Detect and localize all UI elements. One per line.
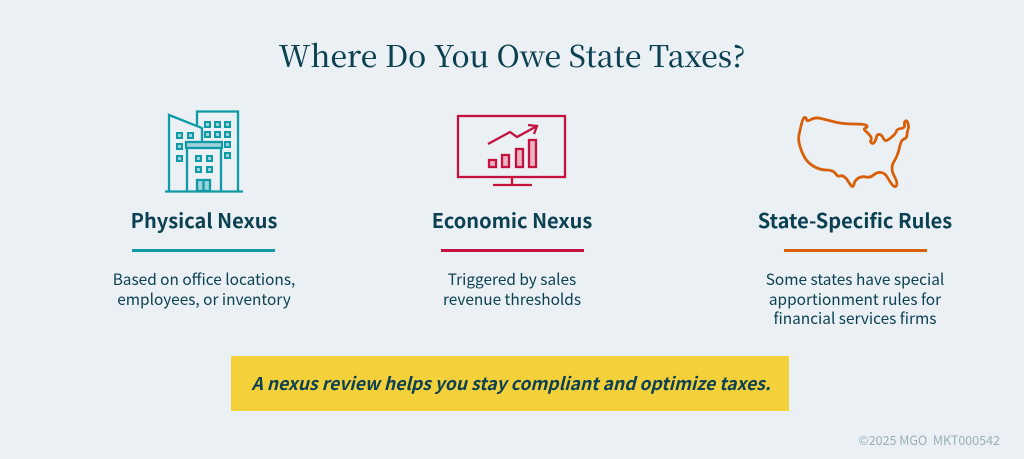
text: physical nexus description: employees, or inventory [117,288,291,310]
rule: crimson [441,249,584,252]
heading: Economic Nexus: Economic Nexus [432,205,592,234]
text: physical nexus description [113,268,295,310]
rule: teal [132,249,275,252]
text: physical nexus description: Based on office locations, [113,268,295,290]
rule: orange [784,249,927,252]
text: economic nexus description [443,268,581,310]
text: state-specific rules description: financial services firms [774,307,936,329]
callout banner [231,356,789,411]
heading: Physical Nexus: Physical Nexus [131,205,277,234]
copyright note: ©2025 MGO MKT000542 [858,430,1000,449]
text: economic nexus description: Triggered by sales [448,268,576,290]
text: state-specific rules description [766,268,944,329]
text: state-specific rules description: apportionment rules for [769,288,941,310]
callout banner: A nexus review helps you stay compliant and optimize taxes. [251,371,771,396]
text: state-specific rules description: Some states have special [766,268,944,290]
heading: State-Specific Rules: State-Specific Rules [758,205,952,234]
title: Where Do You Owe State Taxes? [279,32,745,76]
text: economic nexus description: revenue thresholds [443,288,581,310]
